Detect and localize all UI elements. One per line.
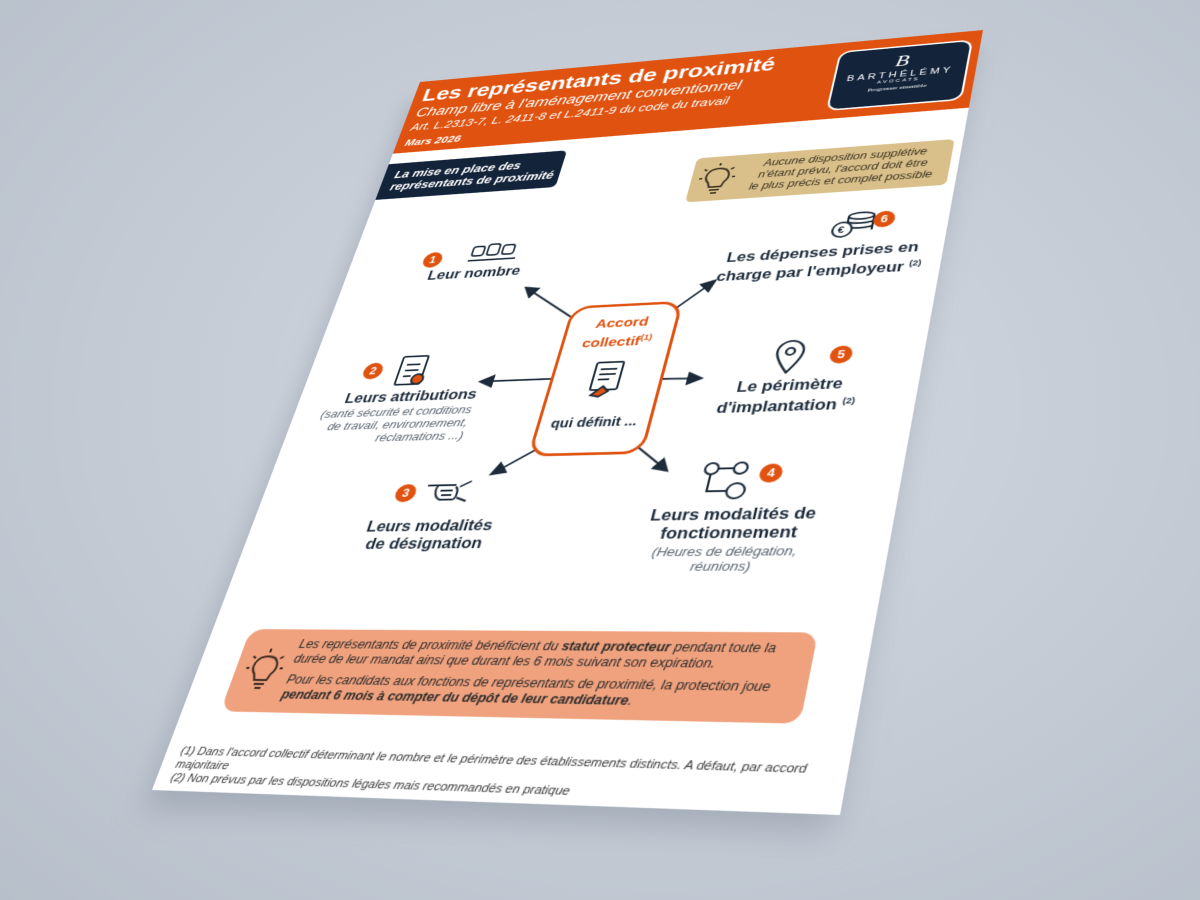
item 4: fonctionnement: (Heures de délégation, — [650, 544, 798, 559]
center box: accord collectif: collectif(1) — [580, 333, 653, 351]
center box: accord collectif: qui définit ... — [549, 414, 639, 430]
footnotes: (2) Non prévus par les dispositions légales mais recommandés en pratique — [169, 772, 571, 798]
icon: gears — [662, 461, 750, 500]
icon: document — [588, 360, 626, 398]
item 5: périmètre: Le périmètre — [735, 377, 844, 396]
item 2: attributions: réclamations ...) — [374, 429, 465, 444]
item 3: désignation: de désignation — [363, 536, 484, 553]
item 4: fonctionnement: 4 — [766, 466, 776, 480]
item 2: attributions: 2 — [368, 365, 378, 377]
date: Mars 2026 — [403, 133, 463, 148]
callout: tan note: le plus précis et complet possible — [748, 168, 933, 192]
icon: clipboard — [393, 354, 430, 386]
item 3: désignation — [363, 480, 495, 553]
arrows — [478, 278, 718, 476]
callout: statut protecteur — [220, 629, 818, 724]
logo: Progresser ensemble — [867, 82, 927, 93]
item 2: attributions: de travail, environnement, — [326, 416, 469, 433]
item 6: dépenses: 6 — [879, 213, 889, 225]
item 3: désignation: 3 — [400, 487, 411, 499]
item 4: fonctionnement — [649, 461, 818, 574]
footnotes: (1) Dans l'accord collectif déterminant le nombre et le périmètre des établissements distincts. A défaut, par accord majoritaire — [174, 745, 808, 776]
icon: bulb — [698, 163, 736, 194]
item 1: nombre — [422, 242, 522, 283]
document page: réunions) — [689, 560, 752, 574]
item 6: dépenses: charge par l'employeur (2) — [715, 258, 922, 285]
logo: AVOCATS — [876, 77, 920, 85]
item 5: périmètre: 5 — [836, 348, 846, 361]
logo: BARTHÉLÉMY — [846, 65, 954, 83]
center box: accord collectif — [527, 301, 684, 457]
item 2: attributions: Leurs attributions — [343, 387, 479, 406]
header band — [393, 30, 983, 154]
title: Les représentants de proximité — [419, 53, 778, 105]
item 5: périmètre — [715, 340, 856, 417]
item 2: attributions: (santé sécurité et conditions — [319, 404, 474, 420]
callout: statut protecteur: Les représentants de proximité bénéficient du statut protecteur pendant toute la durée de leur mandat ainsi que durant les 6 mois suivant son expiration. Pour les candidats aux fonctions de représentants de proximité, la protection joue pendant 6 mois à compter du dépôt de leur candidature. — [279, 637, 778, 708]
item 5: périmètre: d'implantation (2) — [715, 396, 856, 417]
section label: La mise en place des — [393, 159, 523, 180]
item 4: fonctionnement: fonctionnement — [658, 525, 799, 543]
center box: accord collectif: Accord — [594, 315, 650, 331]
item 6: dépenses — [715, 210, 922, 285]
footnotes — [169, 745, 809, 798]
subtitle: Champ libre à l'aménagement conventionnel — [414, 78, 743, 120]
document page — [152, 30, 983, 815]
logo: B — [894, 51, 911, 70]
logo — [826, 39, 973, 111]
icon: bulb — [246, 648, 285, 690]
item 6: dépenses: Les dépenses prises en — [725, 240, 920, 265]
section label — [375, 150, 567, 200]
item 2: attributions — [319, 354, 479, 444]
item 1: nombre: Leur nombre — [426, 264, 522, 283]
section label: représentants de proximité — [388, 169, 555, 193]
icon: hand pointing — [428, 480, 473, 502]
callout: tan note — [685, 139, 955, 202]
icon: people — [467, 242, 517, 262]
callout: tan note: Aucune disposition supplétive — [763, 146, 928, 168]
icon: location pin — [775, 340, 806, 374]
article reference: Art. L.2313-7, L. 2411-8 et L.2411-9 du code du travail — [409, 95, 730, 133]
item 4: fonctionnement: Leurs modalités de — [649, 506, 818, 524]
icon: coins: € — [837, 224, 845, 235]
callout: tan note: n'étant prévu, l'accord doit être — [757, 157, 929, 180]
icon: coins — [716, 211, 876, 280]
item 1: nombre: 1 — [428, 254, 438, 266]
item 3: désignation: Leurs modalités — [364, 518, 495, 535]
